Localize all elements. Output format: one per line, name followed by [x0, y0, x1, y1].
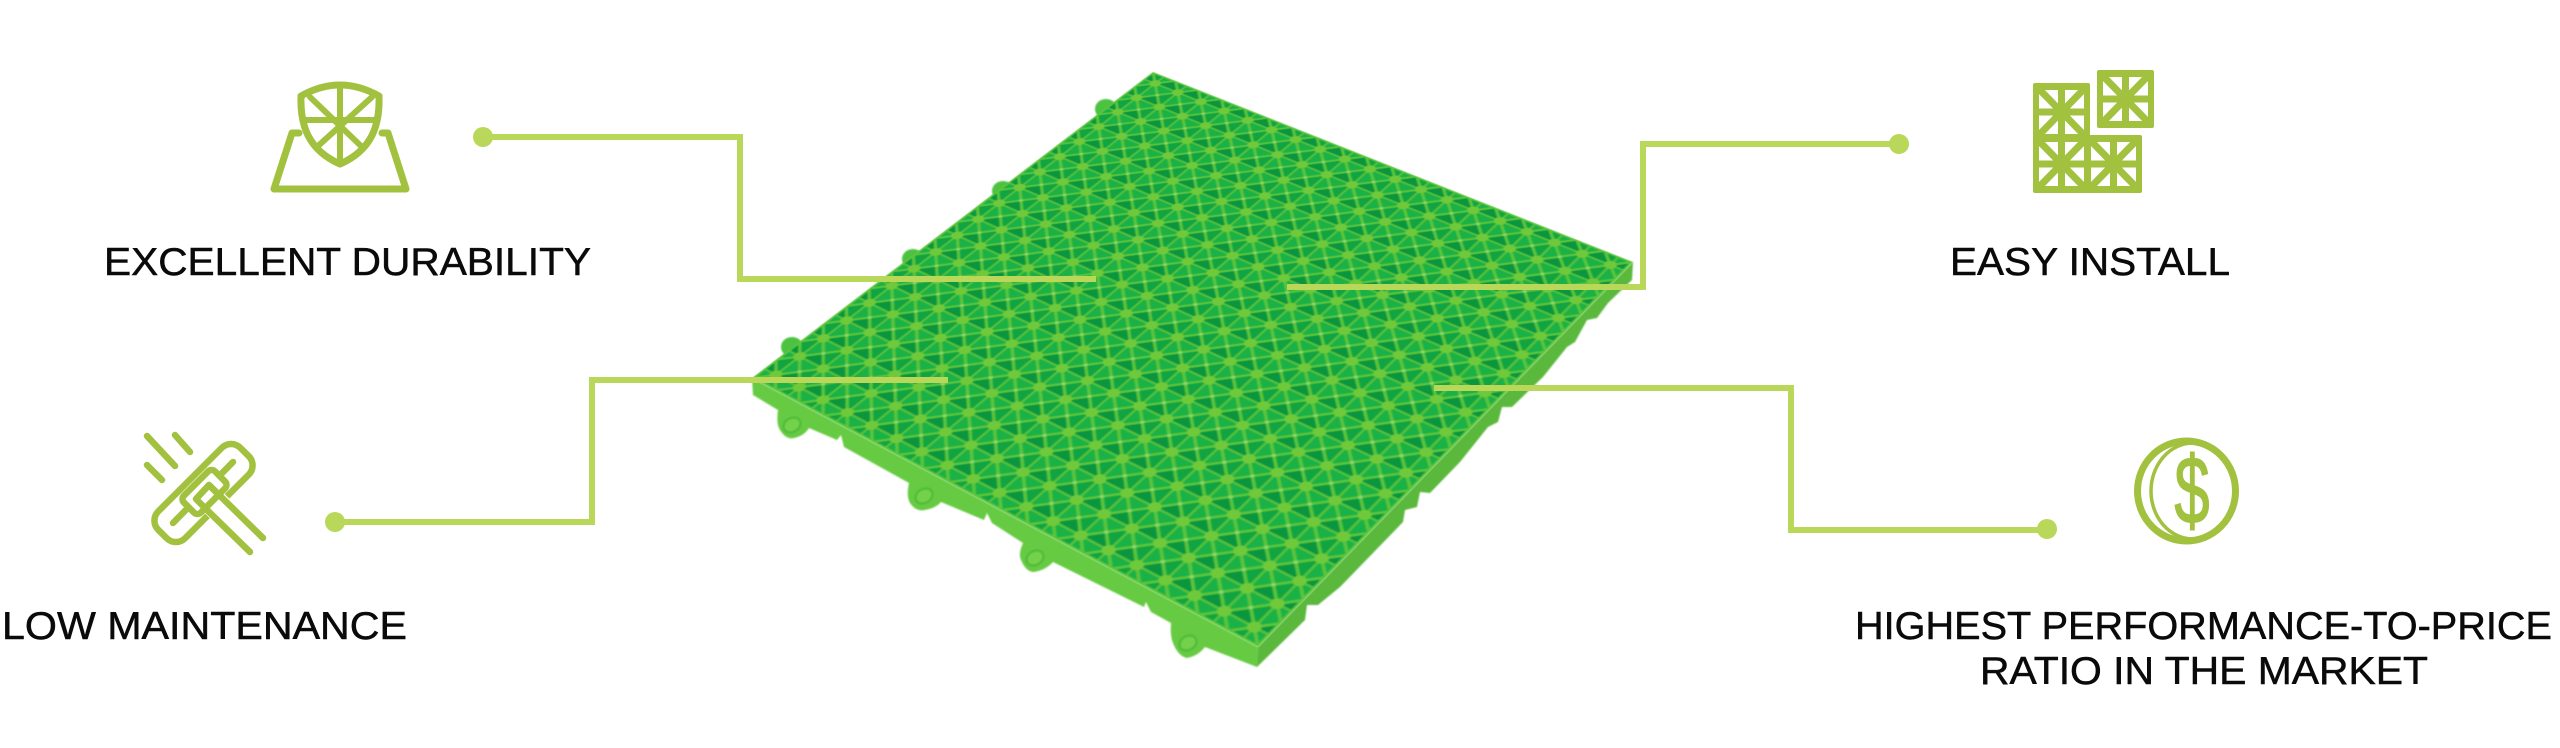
connector: low maintenance: [325, 380, 948, 532]
icon: interlocking tiles: [2033, 70, 2154, 193]
mat top surface lattice: [752, 72, 1634, 647]
connector: price ratio: [1434, 388, 2057, 539]
connector: excellent durability: [473, 127, 1096, 279]
label: easy install: EASY INSTALL: [1950, 241, 2230, 284]
clip holes: [781, 414, 1199, 654]
top-left edge tabs: [781, 99, 1117, 357]
connector: easy install: [1287, 134, 1909, 287]
label: highest performance-to-price ratio: HIGHEST PERFORMANCE-TO-PRICE: [1855, 605, 2552, 648]
label: excellent durability: EXCELLENT DURABILITY: [104, 241, 591, 284]
icon: dollar coin: $: [2174, 437, 2210, 544]
label: highest performance-to-price ratio: RATIO IN THE MARKET: [1980, 650, 2428, 693]
icon: shield on tile: [274, 85, 406, 189]
icon: mop: [147, 435, 263, 552]
right side wall with notches: [1257, 262, 1633, 667]
label: low maintenance: LOW MAINTENANCE: [2, 605, 407, 648]
front side wall with clips: [752, 378, 1258, 667]
icon: dollar coin: [2138, 437, 2236, 544]
label: highest performance-to-price ratio: [1855, 605, 2552, 693]
